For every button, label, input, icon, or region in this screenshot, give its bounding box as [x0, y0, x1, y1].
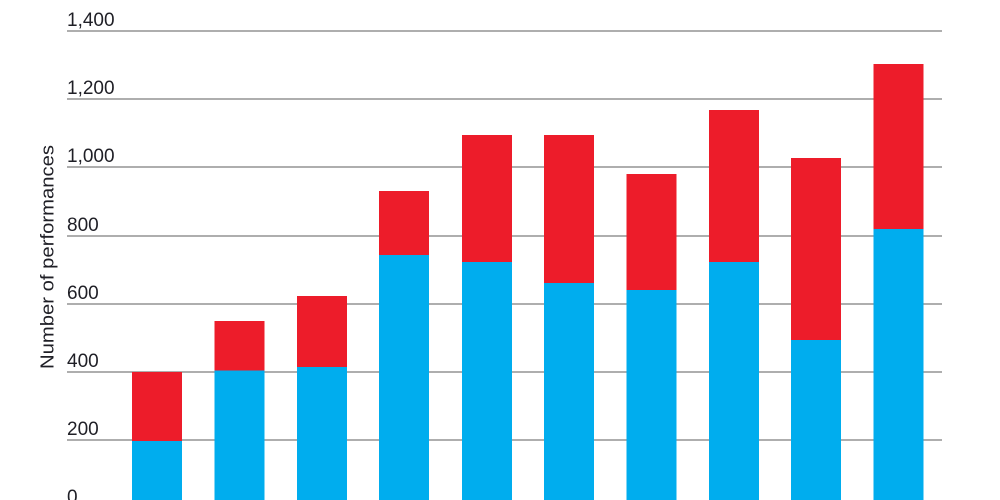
- y-axis tick labels: 800: [67, 215, 99, 236]
- bar 2: [214, 321, 264, 500]
- bar 1: [132, 372, 182, 500]
- bar 5: [462, 135, 512, 500]
- y-axis tick labels: 600: [67, 283, 99, 304]
- y-axis tick labels: 200: [67, 419, 99, 440]
- bar 7: [626, 174, 676, 500]
- bar 8: [709, 110, 759, 500]
- bar 9: [791, 158, 841, 500]
- bar 3: [297, 296, 347, 500]
- y-axis tick labels: 1,000: [67, 146, 115, 167]
- y-axis tick labels: [67, 10, 115, 500]
- bar 4: [379, 191, 429, 500]
- y-axis tick labels: 400: [67, 351, 99, 372]
- y-axis tick labels: 1,400: [67, 10, 115, 31]
- bar 10: [874, 64, 924, 500]
- y-axis tick labels: 1,200: [67, 78, 115, 99]
- bar 6: [544, 135, 594, 500]
- y-axis title: Number of performances: [36, 145, 58, 369]
